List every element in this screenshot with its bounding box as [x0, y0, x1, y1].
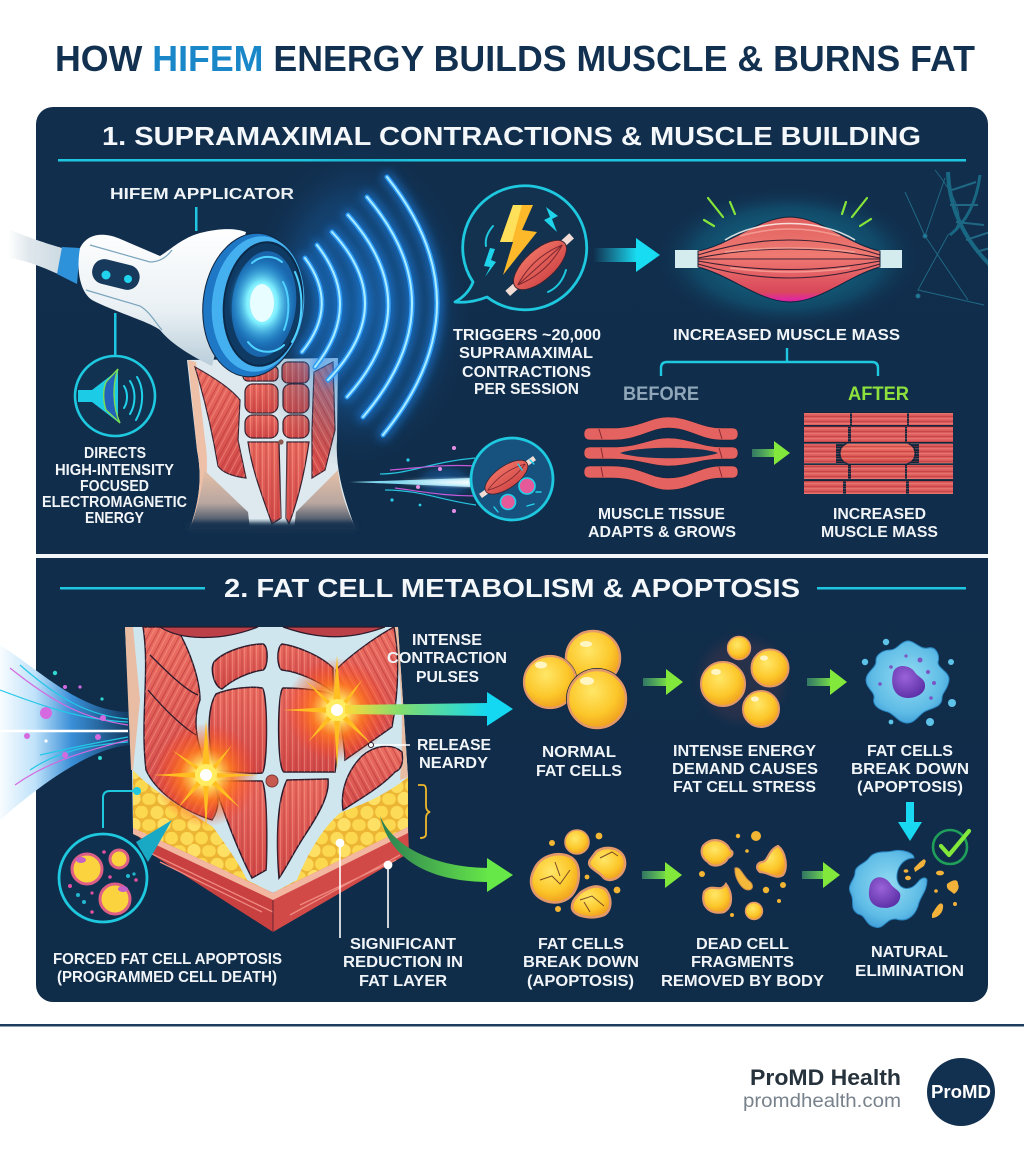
text: release nearby [417, 737, 491, 772]
leaders: fat layer [336, 839, 392, 938]
right oblique [312, 362, 335, 478]
abs blocks [243, 362, 309, 524]
icon: enlarged muscle [653, 186, 923, 330]
text: fat cells break down lower [523, 936, 639, 990]
divider between sections [36, 554, 988, 558]
text: triggers contractions: TRIGGERS ~20,000 [453, 327, 601, 344]
section 1 heading: 1. SUPRAMAXIMAL CONTRACTIONS & MUSCLE BUILDING [102, 121, 921, 151]
arrow: contraction pulses [345, 692, 513, 726]
text: dead cell fragments [661, 936, 824, 990]
energy wave glow [245, 140, 475, 470]
text: increased muscle mass caption: INCREASED [833, 506, 926, 523]
text: directs energy: FOCUSED [80, 478, 149, 495]
text: fat cells break down: (APOPTOSIS) [857, 779, 963, 796]
text: intense energy demand [672, 743, 818, 796]
text: muscle tissue adapts [588, 506, 736, 541]
text: reduction in fat layer: FAT LAYER [359, 973, 448, 990]
icon: speech bubble with bolt and muscle [455, 186, 587, 310]
text: forced apoptosis: (PROGRAMMED CELL DEATH) [57, 969, 277, 986]
text: intense energy demand: FAT CELL STRESS [673, 779, 816, 796]
text: fat cells break down lower: BREAK DOWN [523, 954, 639, 971]
arrow: to muscle [593, 238, 660, 272]
leader to apoptosis circle [103, 787, 141, 828]
text: increased muscle mass caption: MUSCLE MASS [821, 524, 938, 541]
left oblique [195, 367, 246, 478]
icon: broken fat cells [531, 830, 625, 917]
arrow [642, 862, 682, 888]
green squeeze ticks [704, 198, 871, 226]
arrow [802, 862, 840, 888]
callout: focused energy icon [75, 313, 155, 436]
text: directs energy: DIRECTS [84, 445, 146, 462]
text: triggers contractions: PER SESSION [474, 381, 579, 398]
icon: phagocyte eliminating fragments [849, 850, 959, 927]
text: increased muscle mass caption [821, 506, 938, 541]
text: directs energy [42, 445, 187, 527]
text: forced apoptosis [53, 951, 282, 986]
panel: muscle building [8, 121, 990, 541]
text: intense contraction pulses: INTENSE [412, 632, 482, 649]
brand name: ProMD Health [750, 1065, 901, 1090]
icon: normal fat cells [523, 631, 628, 730]
navel [266, 775, 278, 787]
footer rule [0, 1024, 1024, 1026]
text: intense energy demand: DEMAND CAUSES [672, 761, 818, 778]
text: intense contraction pulses: PULSES [416, 669, 479, 686]
text: normal fat cells [536, 744, 622, 780]
text: normal fat cells: NORMAL [542, 744, 616, 761]
text: reduction in fat layer: SIGNIFICANT [350, 936, 456, 953]
head rings [196, 228, 310, 382]
text: natural elimination: ELIMINATION [855, 963, 964, 980]
logo [927, 1058, 995, 1126]
text: muscle tissue adapts: MUSCLE TISSUE [598, 506, 725, 523]
abdomen cross-section illustration [125, 627, 409, 932]
pale base [125, 627, 408, 893]
label: HIFEM applicator: HIFEM APPLICATOR [110, 186, 295, 203]
text: release nearby: NEARDY [419, 755, 488, 772]
arrow [807, 669, 847, 695]
text: natural elimination: NATURAL [871, 944, 948, 961]
arrow [643, 669, 683, 695]
icon: stressed fat cells [700, 636, 788, 727]
icon: check mark [933, 830, 969, 864]
arrow: curved green to apoptosis [380, 816, 513, 892]
icon: starburst upper [283, 655, 397, 770]
text: forced apoptosis: FORCED FAT CELL APOPTOSIS [53, 951, 282, 968]
main dark panel [36, 107, 988, 1002]
rectus blocks [209, 644, 338, 878]
brand URL: promdhealth.com [743, 1091, 901, 1112]
callout: apoptosis magnifier [59, 820, 172, 922]
text: triggers contractions: SUPRAMAXIMAL [459, 345, 593, 362]
right oblique upper [336, 627, 398, 760]
text: triggers contractions [453, 327, 601, 398]
label: after: AFTER [848, 384, 909, 405]
text: directs energy: ELECTROMAGNETIC [42, 494, 187, 511]
arrow: down [898, 802, 922, 841]
icon: starburst lower [153, 720, 258, 830]
bracket [661, 348, 878, 376]
text: triggers contractions: CONTRACTIONS [462, 364, 591, 381]
text: release nearby: RELEASE [417, 737, 491, 754]
outer skin edges [125, 627, 140, 770]
icon: muscle before [584, 417, 738, 490]
DNA decoration [905, 170, 990, 305]
arrow: before to after [752, 441, 790, 465]
section 2 heading: 2. FAT CELL METABOLISM & APOPTOSIS [224, 573, 800, 603]
top arcs [160, 627, 385, 638]
torso illustration [187, 358, 357, 532]
energy wave arcs [302, 177, 437, 435]
text: intense energy demand: INTENSE ENERGY [673, 743, 816, 760]
label: before: BEFORE [623, 384, 699, 405]
icon: muscle after [804, 412, 953, 494]
panel: fat cell metabolism [0, 573, 969, 990]
text: reduction in fat layer [343, 936, 463, 990]
text: fat cells break down: FAT CELLS [867, 743, 953, 760]
comet: energy streak [350, 446, 479, 513]
icon: HIFEM applicator device [8, 228, 311, 382]
text: fat cells break down lower: FAT CELLS [538, 936, 624, 953]
text: fat cells break down lower: (APOPTOSIS) [527, 973, 634, 990]
title: HOW HIFEM ENERGY BUILDS MUSCLE & BURNS FAT [55, 38, 975, 79]
energy beam from left [0, 645, 130, 820]
text: directs energy: HIGH-INTENSITY [55, 462, 174, 479]
text: directs energy: ENERGY [85, 510, 144, 527]
text: fat cells break down: BREAK DOWN [851, 761, 969, 778]
icon: muscle cell circle [471, 438, 553, 520]
right oblique lower [342, 746, 403, 810]
text: natural elimination [855, 944, 964, 980]
fat layers [133, 770, 273, 893]
icon: dead cell fragments [699, 831, 786, 920]
text: dead cell fragments: FRAGMENTS [691, 954, 794, 971]
text: muscle tissue adapts: ADAPTS & GROWS [588, 524, 736, 541]
text: dead cell fragments: DEAD CELL [696, 936, 789, 953]
icon: macrophage cell [862, 639, 956, 726]
left oblique [143, 627, 218, 820]
text: increased muscle mass: INCREASED MUSCLE MASS [673, 327, 900, 344]
text: dead cell fragments: REMOVED BY BODY [661, 973, 824, 990]
text: intense contraction pulses [387, 632, 507, 686]
text: normal fat cells: FAT CELLS [536, 763, 622, 780]
skin and deep muscle wedge [133, 828, 273, 932]
logo: ProMD [931, 1082, 991, 1102]
leader: release [368, 742, 410, 748]
footer brand [743, 1065, 901, 1112]
text: reduction in fat layer: REDUCTION IN [343, 954, 463, 971]
text: intense contraction pulses: CONTRACTION [387, 650, 507, 667]
yellow bracket [418, 785, 430, 838]
text: fat cells break down [851, 743, 969, 796]
